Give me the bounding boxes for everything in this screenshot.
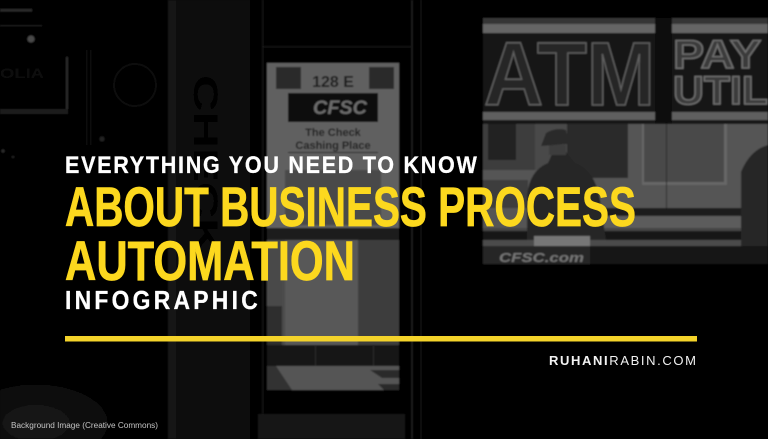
site credit: RUHANIRABIN.COM: [549, 353, 696, 368]
pillar with vertical sign: CHECK: [186, 75, 224, 256]
floor glow: [0, 375, 120, 439]
shop door: The Check: [305, 127, 362, 139]
left shop window: [0, 9, 156, 158]
left shop window: OLIA: [0, 65, 44, 81]
ATM storefront window: CFSC.com: [499, 250, 585, 265]
pillar with vertical sign: [168, 0, 250, 439]
shop door: 128 E: [312, 74, 354, 91]
heading: infographic: INFOGRAPHIC: [65, 287, 258, 315]
headline group: [65, 151, 636, 315]
lower door panel: [267, 228, 399, 240]
heading: everything you need to know: EVERYTHING YOU NEED TO KNOW: [65, 151, 477, 178]
shop door: CFSC: [313, 98, 367, 119]
heading: automation: AUTOMATION: [65, 230, 355, 292]
image credit: Background Image (Creative Commons): [11, 421, 158, 430]
shop door: [250, 0, 422, 439]
door glass panel: [267, 63, 399, 390]
yellow divider rule: [65, 336, 697, 342]
ATM storefront window: ATM: [484, 25, 655, 125]
ATM storefront window: [483, 18, 768, 265]
ATM storefront window: UTIL: [673, 69, 768, 113]
man at ATM: [527, 129, 606, 246]
shop door: Cashing Place: [295, 140, 371, 152]
ATM storefront window: PAY: [673, 33, 761, 77]
